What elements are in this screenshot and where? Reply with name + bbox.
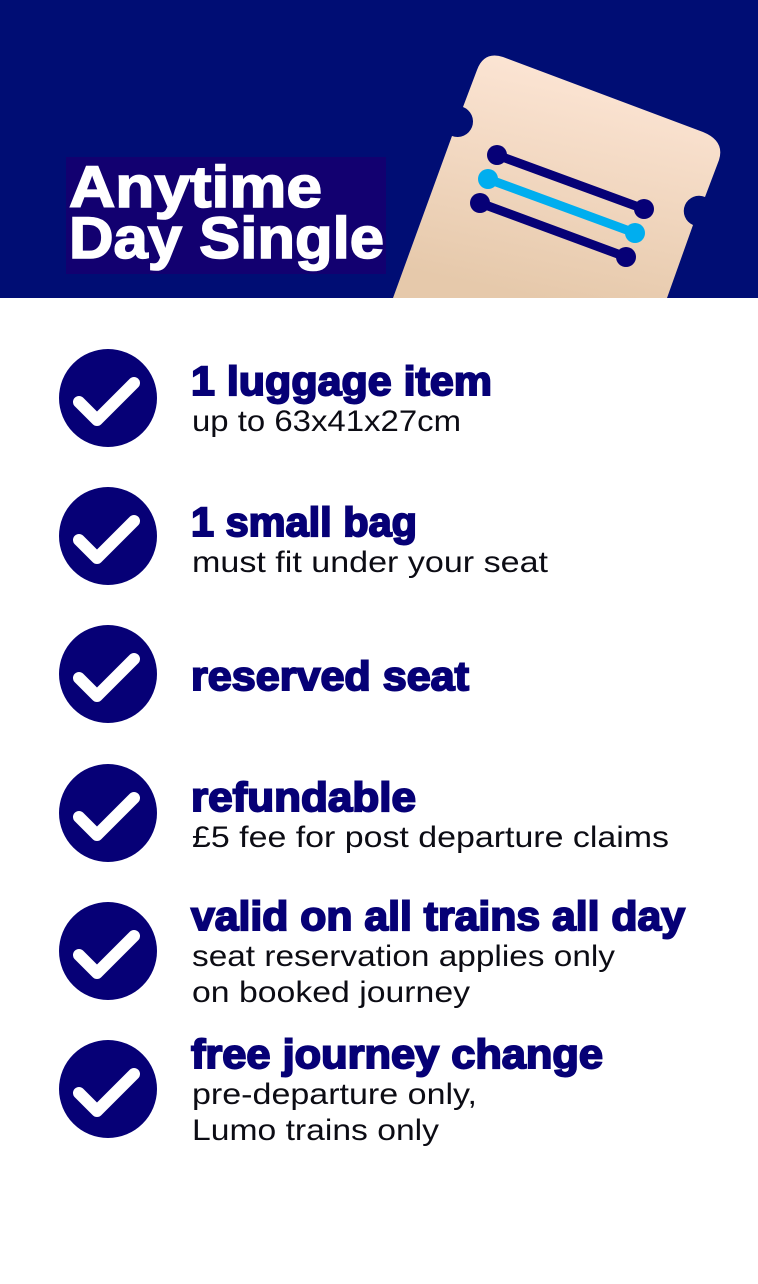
feature: free journey change [59, 1031, 603, 1147]
detail: Lumo trains only [192, 1114, 439, 1147]
title: Day Single [69, 206, 384, 271]
detail [192, 940, 615, 1009]
detail [192, 1078, 477, 1147]
heading: 1 luggage item [191, 358, 492, 404]
heading: valid on all trains all day [191, 893, 685, 939]
header band [0, 0, 758, 298]
title: Anytime [69, 155, 322, 220]
icon: check [59, 625, 157, 723]
title [66, 155, 386, 274]
feature: small bag [59, 487, 549, 585]
icon: check [59, 487, 157, 585]
icon: check [59, 1040, 157, 1138]
icon: check [59, 764, 157, 862]
detail: on booked journey [192, 976, 470, 1009]
icon: check [59, 349, 157, 447]
detail: must fit under your seat [192, 546, 549, 579]
detail: up to 63x41x27cm [192, 405, 461, 438]
detail: pre-departure only, [192, 1078, 477, 1111]
feature: luggage [59, 349, 492, 447]
detail: £5 fee for post departure claims [192, 821, 669, 854]
heading: reserved seat [191, 653, 469, 699]
icon: check [59, 902, 157, 1000]
heading: free journey change [191, 1031, 603, 1077]
feature: reserved seat [59, 625, 469, 723]
heading: 1 small bag [191, 499, 417, 545]
icon: ticket [393, 56, 720, 298]
feature: refundable [59, 764, 669, 862]
feature: valid on all trains [59, 893, 685, 1009]
detail: seat reservation applies only [192, 940, 615, 973]
heading: refundable [191, 774, 416, 820]
